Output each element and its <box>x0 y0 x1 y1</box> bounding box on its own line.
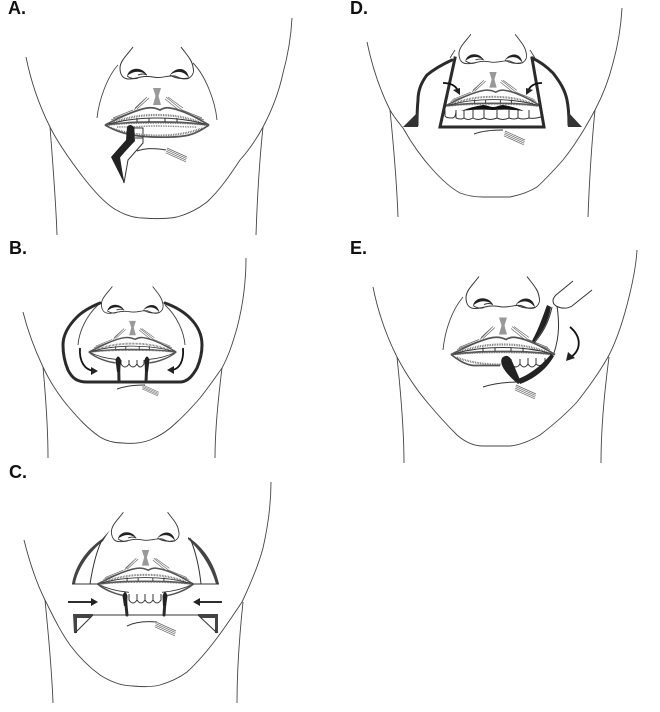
chin crease <box>137 149 166 151</box>
nose and lips <box>97 47 217 137</box>
small cheek marks <box>450 50 535 58</box>
face outline <box>24 482 271 687</box>
panel B: bilateral arc flaps <box>23 258 246 458</box>
crease hatch <box>142 385 159 396</box>
vertical cuts <box>118 359 147 382</box>
nose and lips <box>451 276 555 366</box>
nose and upper lip <box>445 34 541 106</box>
side curves <box>417 60 452 125</box>
arrows <box>80 348 94 371</box>
dark triangles <box>403 112 418 127</box>
panel A: face with Z-shaped incision <box>26 18 292 235</box>
rectangular incision <box>440 58 544 127</box>
upper flap left <box>72 530 110 584</box>
lower lip left part <box>457 358 501 364</box>
chin crease <box>117 385 145 389</box>
thin flap edge <box>534 306 559 353</box>
chin crease <box>127 622 157 626</box>
face outline <box>26 18 292 219</box>
thick arc incision <box>63 303 202 382</box>
chin crease <box>483 382 520 387</box>
upper flap right <box>188 537 219 584</box>
face outline <box>23 258 246 443</box>
vertical teardrop tops <box>122 592 168 606</box>
chin crease <box>474 130 503 134</box>
arrows <box>68 601 95 603</box>
label B: B. <box>9 238 27 258</box>
arrow <box>570 327 579 357</box>
neck lines <box>45 600 243 703</box>
neck lines <box>390 110 595 217</box>
thick incision <box>111 125 135 183</box>
panel C: advancement flaps <box>24 482 271 703</box>
neck lines <box>397 357 609 463</box>
vertical cuts <box>126 600 165 615</box>
panel E: flap pulled with forceps <box>373 250 637 463</box>
crease hatch <box>515 385 536 399</box>
neck lines <box>43 367 222 458</box>
teeth <box>121 360 144 367</box>
flap white wedge and thin outline <box>119 128 143 183</box>
vertical teardrop tops <box>116 356 150 372</box>
teeth <box>129 594 161 603</box>
panel D: rectangular flap with exposed teeth <box>367 8 622 217</box>
label E: E. <box>350 238 367 258</box>
finger <box>553 281 592 308</box>
neck lines <box>50 127 263 235</box>
crease hatch <box>166 148 187 162</box>
thick lower diagonal <box>518 354 554 384</box>
teeth <box>511 358 545 367</box>
lower horizontal incision with triangles <box>73 614 217 616</box>
face outline <box>367 8 622 197</box>
label C: C. <box>9 462 27 482</box>
crease hatch <box>504 131 525 145</box>
nose and lips <box>98 512 193 596</box>
nose and lips <box>89 286 176 363</box>
dark mouth opening <box>461 105 524 111</box>
crease hatch <box>155 622 176 636</box>
teeth <box>445 110 541 120</box>
left cheek line <box>443 297 463 350</box>
arrows <box>443 83 458 91</box>
thick upper flap edge <box>532 305 551 342</box>
face outline <box>373 250 637 446</box>
thick teardrop flap cut <box>501 356 521 384</box>
cheek lines <box>78 305 185 345</box>
